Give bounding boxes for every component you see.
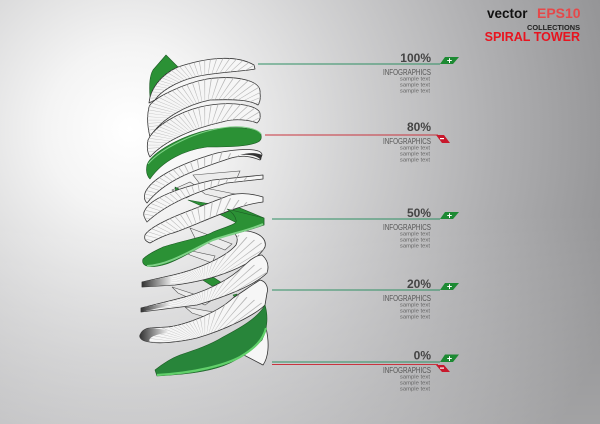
badge: plus [440, 212, 459, 219]
badge: minus [436, 365, 450, 372]
callout: 80%: sample text [400, 146, 430, 152]
badge: plus [440, 283, 459, 290]
white band 5 [144, 149, 262, 204]
green band 4 [146, 127, 261, 179]
callout: 50%: 50% [407, 206, 431, 220]
callout: 0% [272, 348, 459, 392]
white band 1 [148, 58, 256, 104]
callout: 0%: sample text [400, 380, 430, 386]
callout: 100%: INFOGRAPHICS [383, 68, 431, 77]
white band 7 [144, 193, 264, 244]
callout: 80%: sample text [400, 158, 430, 164]
callout: 100%: sample text [400, 76, 430, 82]
callout: 80%: INFOGRAPHICS [383, 137, 431, 146]
callout: 80%: 80% [407, 120, 431, 134]
callout: 80%: sample text [400, 152, 430, 158]
title block: vector [487, 6, 528, 21]
callout: 100%: sample text [400, 82, 430, 88]
callout: 50%: sample text [400, 244, 430, 250]
callout: 100%: sample text [400, 88, 430, 94]
title block [485, 5, 581, 44]
back inner strips [172, 171, 264, 318]
callout: 20%: 20% [407, 277, 431, 291]
title block: EPS10 [537, 5, 581, 21]
white band 10 [140, 254, 268, 312]
callout: 50%: INFOGRAPHICS [383, 223, 431, 232]
white band 2 [147, 77, 261, 136]
white band 6 [143, 174, 264, 222]
callout: 20% [272, 277, 459, 320]
callout: 100% [258, 51, 459, 94]
callout: 80% [265, 120, 450, 164]
badge: plus [440, 354, 459, 362]
callout: 20%: + [447, 282, 452, 292]
back bottom white band [222, 328, 268, 365]
white band 3 [146, 103, 261, 158]
green band 8 [143, 209, 264, 267]
callout: 0%: + [447, 354, 452, 364]
callout: 50%: sample text [400, 238, 430, 244]
callout: 20%: INFOGRAPHICS [383, 294, 431, 303]
white band 9 [142, 230, 266, 288]
callout: 100%: + [447, 56, 452, 66]
badge: plus [440, 57, 459, 64]
callout: 0%: sample text [400, 374, 430, 380]
callout: 50%: sample text [400, 232, 430, 238]
callout: 20%: sample text [400, 314, 430, 320]
spiral tower [140, 55, 268, 376]
callout: 50%: + [447, 210, 452, 220]
callout: 100%: 100% [400, 51, 431, 65]
callout: 0%: sample text [400, 386, 430, 392]
badge: minus [436, 135, 450, 143]
callout: 0%: INFOGRAPHICS [383, 366, 431, 375]
bottom green band [155, 305, 267, 376]
callout: 50% [272, 206, 459, 250]
back green tip band [150, 55, 178, 97]
callout: 0%: 0% [414, 348, 431, 362]
title block: COLLECTIONS [527, 23, 580, 32]
white band 11 [139, 280, 268, 344]
callout: 20%: sample text [400, 308, 430, 314]
title block: SPIRAL TOWER [485, 30, 580, 44]
callout: 20%: sample text [400, 302, 430, 308]
